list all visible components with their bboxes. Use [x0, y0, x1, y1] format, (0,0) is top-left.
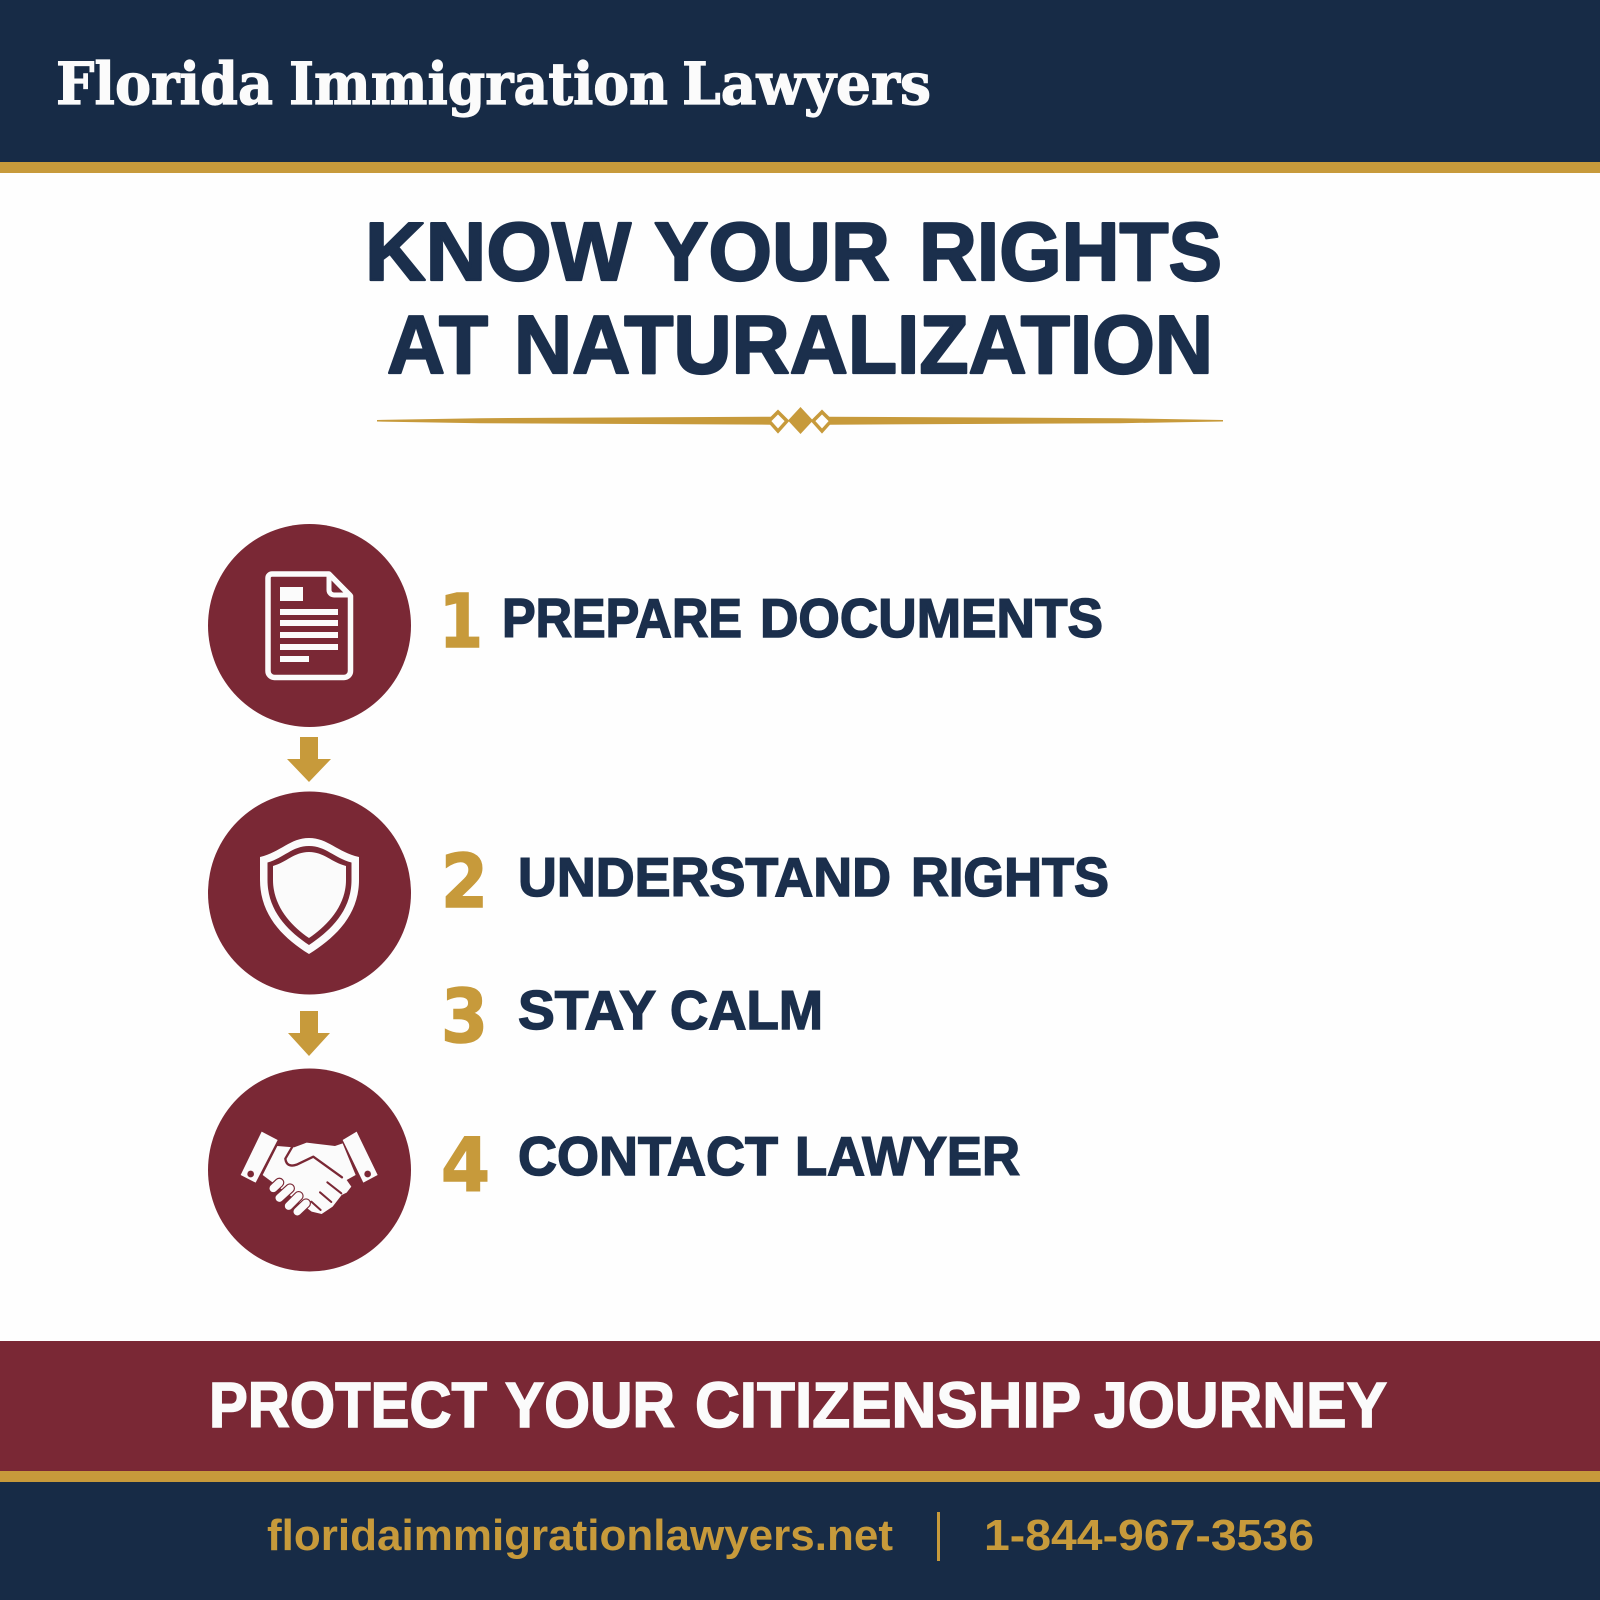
title	[365, 205, 1222, 391]
title: YOUR	[654, 205, 890, 298]
step 3: 3	[441, 974, 488, 1060]
icon: shield	[260, 838, 359, 954]
firm name: Florida	[56, 50, 273, 118]
banner: protect your citizenship journey: YOUR	[505, 1369, 675, 1441]
step 4	[441, 1123, 1020, 1209]
step 1: DOCUMENTS	[760, 587, 1103, 649]
title: RIGHTS	[919, 205, 1222, 298]
footer band	[0, 1471, 1600, 1600]
website: floridaimmigrationlawyers.net	[267, 1511, 893, 1560]
step 3: STAY	[518, 979, 655, 1041]
step circle: document icon	[208, 524, 411, 727]
icon: handshake	[241, 1132, 378, 1214]
banner: protect your citizenship journey: PROTECT	[209, 1369, 487, 1441]
arrow: step two to three	[288, 1011, 330, 1056]
title: KNOW	[365, 205, 632, 298]
banner: protect your citizenship journey: CITIZENSHIP	[695, 1369, 1080, 1441]
step 3: CALM	[670, 979, 823, 1041]
title: NATURALIZATION	[514, 298, 1213, 391]
step circle: shield icon	[208, 792, 411, 994]
arrow: step one to two	[287, 737, 331, 782]
firm name: Lawyers	[682, 50, 931, 118]
step 2: UNDERSTAND	[518, 846, 891, 908]
step 3	[441, 974, 823, 1060]
firm name: Immigration	[289, 50, 668, 118]
step circle: handshake icon	[208, 1068, 411, 1272]
step 1: PREPARE	[502, 587, 742, 649]
phone: 1-844-967-3536	[984, 1511, 1314, 1560]
step 4: LAWYER	[795, 1125, 1020, 1187]
step 1: 1	[439, 579, 483, 665]
banner: protect your citizenship journey	[0, 1341, 1600, 1471]
banner: protect your citizenship journey: JOURNEY	[1094, 1369, 1387, 1441]
step 2: RIGHTS	[911, 846, 1109, 908]
step 2	[441, 839, 1109, 925]
title divider ornament	[377, 407, 1223, 434]
icon: document	[268, 574, 351, 678]
separator	[937, 1512, 940, 1561]
title: AT	[387, 298, 488, 391]
step 4: CONTACT	[518, 1125, 778, 1187]
step 2: 2	[441, 839, 488, 925]
header band	[0, 0, 1600, 173]
step 1	[439, 579, 1103, 665]
step 4: 4	[441, 1123, 490, 1209]
